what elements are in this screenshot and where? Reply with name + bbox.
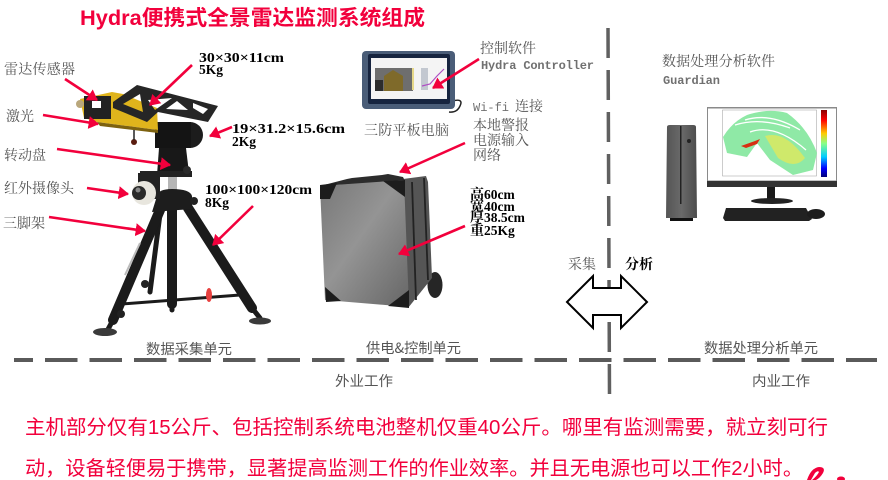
arrow: to camera	[87, 188, 128, 194]
spec: case dimensions: 重25Kg	[470, 222, 515, 239]
label: tripod: 三脚架	[3, 215, 45, 232]
label: case features: Wi-fi	[473, 101, 509, 115]
text block: summary: 主机部分仅有15公斤、包括控制系统电池整机仅重40公斤。哪里有监测需要，就立刻可行	[25, 416, 828, 439]
spec: gimbal dimensions: 19×31.2×15.6cm	[232, 121, 346, 136]
icon: case side	[403, 176, 432, 308]
label: software name: Guardian	[663, 74, 720, 88]
spec: case dimensions	[470, 186, 526, 239]
label: power and control unit: 供电&控制单元	[366, 338, 461, 358]
spec: tripod dimensions: 8Kg	[205, 195, 229, 210]
spec: tripod dimensions: 100×100×120cm	[205, 182, 313, 197]
icon: case top	[320, 174, 405, 186]
icon: wheel	[428, 272, 442, 298]
spec: radar dimensions	[199, 50, 285, 77]
label: control software: 控制软件	[480, 40, 536, 57]
label: case features: 网络	[473, 148, 501, 164]
label: case features: 电源输入	[473, 132, 529, 149]
arrow: to case body	[399, 226, 465, 254]
panel: power and control case	[320, 174, 442, 308]
arrow: to tripod left	[49, 217, 145, 231]
label: field work: 外业工作	[335, 371, 393, 391]
spec: case dimensions: 高60cm	[470, 186, 515, 203]
label: turntable: 转动盘	[4, 147, 46, 164]
label: indoor work: 内业工作	[752, 371, 810, 391]
divider: horizontal dashed line	[14, 358, 877, 362]
label: radar sensor: 雷达传感器	[4, 61, 75, 78]
label: data collection unit: 数据采集单元	[146, 339, 232, 359]
title: Hydra便携式全景雷达监测系统组成	[80, 6, 425, 30]
panel: rugged tablet	[362, 51, 461, 139]
icon: rotating gimbal	[140, 122, 203, 177]
label: laser: 激光	[6, 108, 34, 125]
arrow: to tripod right	[213, 206, 253, 245]
chart: deformation map	[722, 110, 827, 177]
spec: case dimensions: 厚38.5cm	[470, 209, 526, 226]
arrow: to laser	[43, 115, 98, 124]
arrow: to tablet screen	[433, 59, 479, 88]
spec: tripod dimensions	[205, 182, 313, 210]
panel: data analysis software	[662, 53, 837, 221]
spec: case dimensions: 宽40cm	[470, 198, 515, 215]
icon: ball head and pole	[138, 173, 198, 212]
label: collect: 采集	[568, 256, 596, 273]
label: case features: 连接	[515, 98, 544, 115]
text block: summary: 动，设备轻便易于携带，显著提高监测工作的作业效率。并且无电源也可以工作2小时。	[25, 457, 803, 480]
label: control software	[480, 40, 594, 73]
icon: black mounting frame	[113, 85, 218, 122]
divider: vertical dashed line	[608, 28, 610, 396]
arrow: double-headed flow	[567, 276, 647, 328]
icon: tripod	[93, 208, 271, 336]
arrow: to turntable	[57, 149, 170, 165]
spec: radar dimensions: 5Kg	[199, 62, 223, 77]
icon: case corners	[320, 180, 409, 308]
spec: gimbal dimensions	[232, 121, 346, 149]
spec: radar dimensions: 30×30×11cm	[199, 50, 285, 65]
panel: data collection unit (radar on tripod)	[76, 85, 271, 336]
icon: mouse	[807, 209, 825, 219]
icon: keyboard	[723, 208, 812, 221]
label: data analysis unit: 数据处理分析单元	[704, 338, 818, 358]
decoration: red script fragment	[807, 467, 845, 480]
arrow: to case top	[400, 143, 465, 172]
label: case features	[473, 98, 544, 164]
icon: yellow radar sensor	[76, 92, 158, 145]
label: software name: 数据处理分析软件	[662, 53, 775, 70]
icon: desktop tower	[666, 125, 697, 221]
label: case features: 本地警报	[473, 117, 529, 134]
label: tablet: 三防平板电脑	[364, 122, 449, 139]
icon: tablet	[362, 51, 461, 112]
icon: case front	[320, 180, 409, 307]
label: software name	[662, 53, 775, 88]
red pointer arrows	[43, 59, 479, 254]
label: control software: Hydra Controller	[481, 59, 594, 73]
arrow: to radar body	[150, 65, 192, 105]
label: infrared camera: 红外摄像头	[4, 180, 75, 197]
icon: infrared camera	[132, 181, 156, 205]
icon: case rails	[412, 178, 428, 300]
text block: summary	[25, 416, 828, 480]
icon: monitor	[707, 107, 837, 204]
spec: gimbal dimensions: 2Kg	[232, 134, 256, 149]
arrow: to radar sensor	[65, 79, 97, 100]
arrow: to gimbal	[210, 127, 232, 136]
label: analyze: 分析	[625, 256, 653, 273]
